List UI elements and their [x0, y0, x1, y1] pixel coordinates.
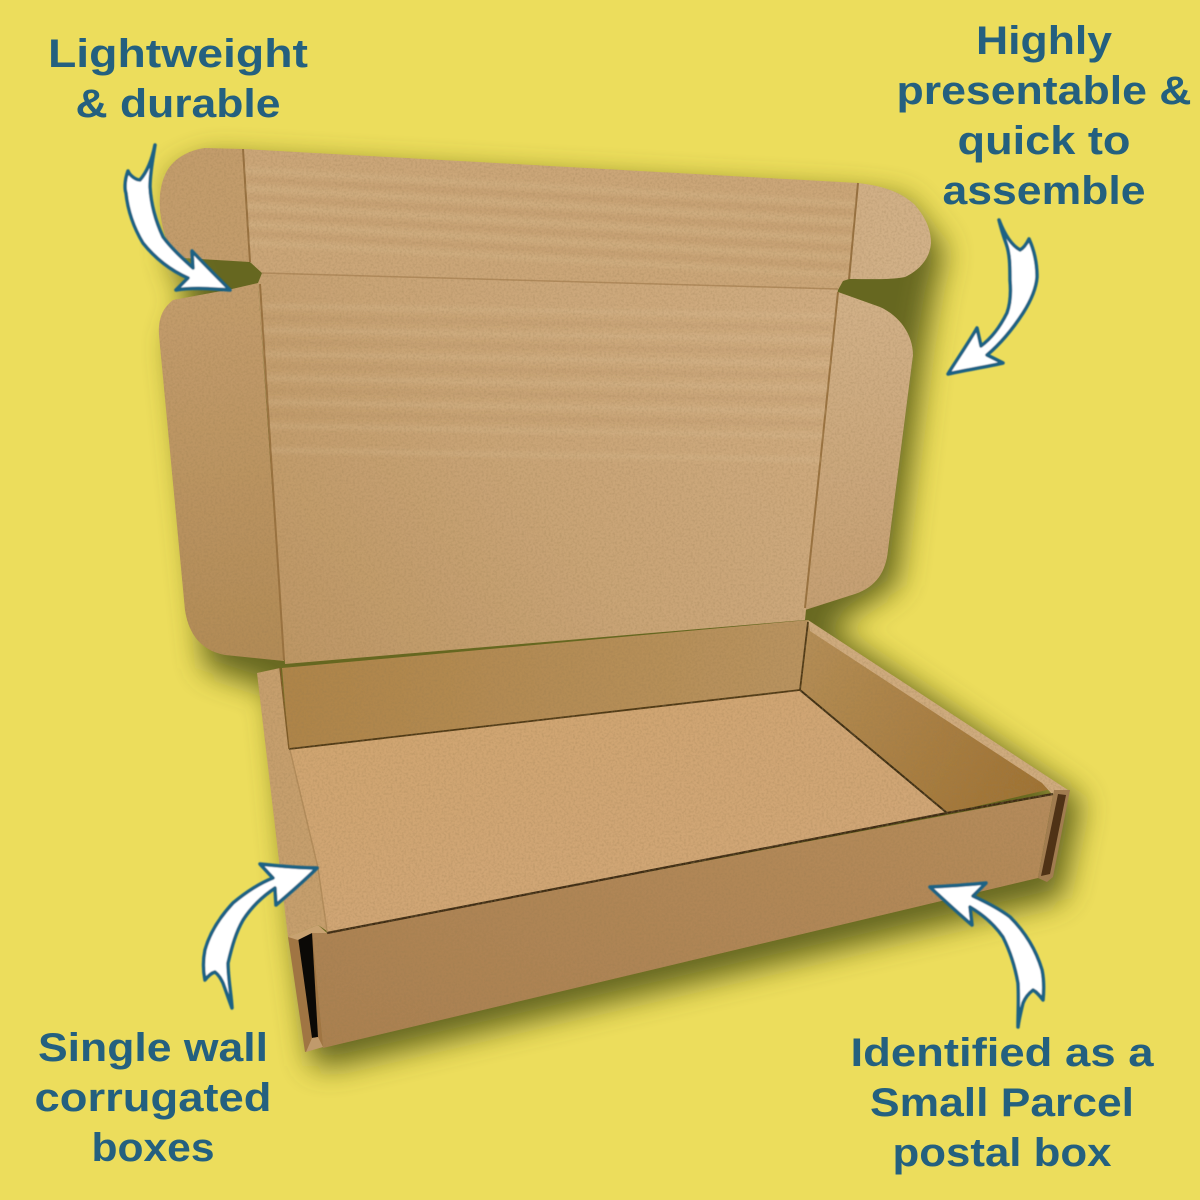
label: single wall corrugated: boxes [92, 1126, 214, 1170]
arrow: lightweight [125, 145, 230, 290]
label: lightweight and durable: Lightweight [48, 32, 308, 76]
label: highly presentable: presentable & [896, 69, 1192, 113]
inner left wall [257, 668, 327, 937]
corrugation lines [243, 170, 858, 460]
inner floor [289, 690, 947, 933]
arrow: identified [930, 883, 1044, 1027]
label: single wall corrugated: corrugated [34, 1076, 272, 1120]
label: lightweight and durable: & durable [76, 82, 280, 126]
right end with dark slot [1038, 790, 1070, 882]
label: highly presentable: Highly [976, 19, 1113, 63]
inner back wall [282, 620, 808, 749]
front wall [312, 795, 1053, 1048]
label: identified small parcel: Identified as a [850, 1031, 1154, 1075]
label: lightweight and durable [48, 32, 308, 126]
label: identified small parcel: Small Parcel [870, 1081, 1134, 1125]
label: single wall corrugated [34, 1026, 272, 1170]
label: highly presentable [896, 19, 1192, 213]
cardboard box [159, 148, 1070, 1052]
right wall rim [808, 620, 1068, 794]
inner right wall [800, 622, 1060, 813]
left end with black slot [288, 925, 327, 1052]
label: single wall corrugated: Single wall [38, 1026, 268, 1070]
box surfaces [159, 148, 1068, 1048]
upper lid flap with side tabs [160, 148, 931, 290]
label: identified small parcel [850, 1031, 1154, 1175]
label: identified small parcel: postal box [892, 1131, 1112, 1175]
main lid panel with side tabs [159, 273, 913, 664]
label: highly presentable: assemble [942, 169, 1146, 213]
box drop shadow [172, 158, 1082, 1066]
arrow: single wall [204, 864, 317, 1008]
label: highly presentable: quick to [958, 119, 1130, 163]
arrow: presentable [948, 220, 1037, 374]
